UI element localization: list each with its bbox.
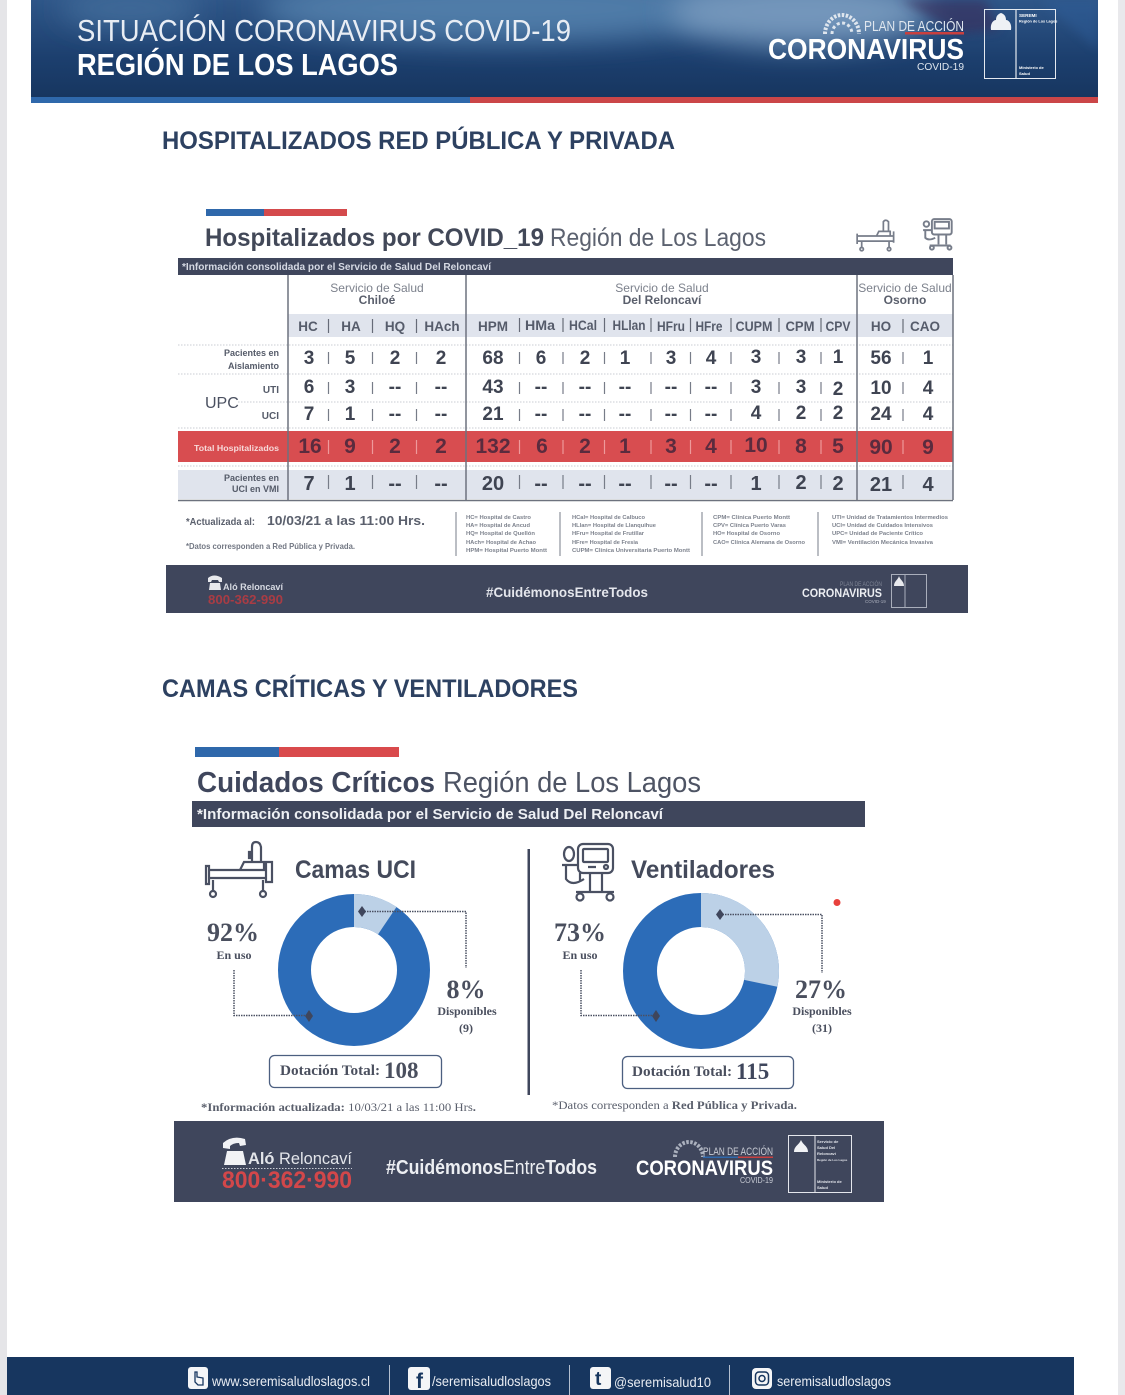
row: UCI en VMI: -- [704,473,718,495]
leader: disponibles camas [358,906,466,968]
row: UCI: 24 [870,404,892,425]
table title [205,224,766,252]
row: UCI en VMI: -- [534,473,548,495]
row: UTI: -- [579,377,591,398]
row: UCI en VMI: -- [618,473,632,495]
abbreviations legend: HQ= Hospital de Quellón [466,531,536,537]
header title [77,13,571,82]
icon: facebook [408,1367,430,1393]
update note [186,513,425,551]
row: UCI en VMI [303,472,934,496]
row: total hospitalizados: 6 [536,435,548,458]
footer band of table infographic: COVID-19 [865,599,886,604]
icon: instagram [752,1368,772,1389]
update note: 10/03/21 a las 11:00 Hrs. [267,513,425,528]
icon: bed small [857,220,894,251]
abbreviations legend: HO= Hospital de Osorno [713,531,781,537]
heading: hospitalizados: HOSPITALIZADOS RED PÚBLICA Y PRIVADA [162,125,675,155]
note: datos corresponden: *Datos corresponden a Red Pública y Privada. [552,1098,797,1112]
row: total hospitalizados: 90 [869,436,893,459]
column header row: HPM [478,319,508,334]
row: UCI: 4 [751,403,762,424]
row: UCI en VMI: 4 [922,474,934,496]
abbreviations legend: HFru= Hospital de Frutillar [572,531,645,537]
row: UCI en VMI: 21 [870,474,892,496]
logo: plan de accion coronavirus: COVID-19 [740,1176,773,1185]
footer band of table infographic [166,565,968,613]
row: UCI: -- [705,404,717,425]
stat: 92% en uso [207,918,259,962]
abbreviations legend: UPC= Unidad de Paciente Crítico [832,531,924,537]
row: UCI: 1 [345,404,356,425]
row labels: UCI [262,411,279,422]
header logo: seremi ministerio de salud [984,9,1057,78]
row: pacientes en aislamiento: 1 [923,348,934,369]
row: UCI: 21 [482,404,504,425]
row: UCI: -- [665,404,677,425]
row: UTI: -- [535,377,547,398]
row: UTI: 10 [870,378,892,399]
row labels: Pacientes en [224,348,279,358]
stat: 73% en uso: En uso [562,948,598,962]
row: pacientes en aislamiento: 4 [706,348,717,369]
row: UCI [304,403,934,425]
stat: 8% disponibles: Disponibles [437,1004,497,1018]
donut chart: camas uci [294,894,414,1030]
abbreviations legend: HC= Hospital de Castro [466,515,532,521]
icon: ventilator [562,844,614,900]
abbreviations legend: HAch= Hospital de Achao [466,540,537,546]
row: pacientes en aislamiento: 3 [304,348,314,369]
row: UTI [304,377,934,400]
logo: servicio de salud [788,1135,852,1192]
logo: servicio de salud: Salud [817,1185,828,1190]
column header row: HFre [696,319,723,334]
row: UTI: 2 [833,379,843,400]
heading: camas criticas: CAMAS CRÍTICAS Y VENTILADORES [162,674,578,703]
icon: tumblr [590,1367,611,1390]
row: total hospitalizados: 2 [389,435,401,458]
logo: plan de accion coronavirus: CORONAVIRUS [636,1157,773,1180]
row: total hospitalizados: 4 [705,435,717,458]
row: pacientes en aislamiento: 2 [436,348,446,369]
abbreviations legend: HFre= Hospital de Fresia [572,540,639,546]
row: UCI en VMI: -- [434,473,448,495]
box: dotacion total ventiladores [622,1056,794,1088]
row: UTI: 3 [796,377,806,398]
column header row: HC [298,319,318,334]
instagram handle: seremisaludloslagos [777,1373,891,1389]
table title: Hospitalizados por COVID_19 [205,224,544,252]
column header row: CUPM [736,319,772,334]
column header row [288,314,953,337]
abbreviations legend: VMI= Ventilación Mecánica Invasiva [832,540,934,546]
column header row: HQ [385,319,405,334]
abbreviations legend: HLlan= Hospital de Llanquihue [572,523,656,529]
stat: 8% disponibles: (9) [459,1021,473,1035]
box: dotacion total camas: Dotación Total: [280,1063,380,1079]
accent stripe [206,209,347,216]
service headers: Chiloé [359,293,396,307]
header logo: plan de accion coronavirus: PLAN DE ACCIÓN [864,18,964,35]
row: total hospitalizados: 9 [344,435,356,458]
footer band of table infographic: Aló Reloncaví [223,582,284,592]
footer band of table infographic: CORONAVIRUS [802,586,882,600]
header logo: plan de accion coronavirus: CORONAVIRUS [768,34,964,66]
column header row: HCal [569,318,597,333]
stat: 27% disponibles [792,975,852,1035]
row: pacientes en aislamiento: 6 [536,348,546,369]
accent stripe [195,747,399,757]
row: pacientes en aislamiento: 1 [833,347,844,368]
column header row: HAch [424,319,460,334]
info band [192,801,865,827]
row: pacientes en aislamiento: 3 [666,348,676,369]
leader: en uso ventiladores [581,970,660,1022]
row: total hospitalizados: 16 [298,435,322,458]
update note: *Datos corresponden a Red Pública y Privada. [186,542,355,551]
row: UTI: -- [435,377,447,398]
column header row: CPM [786,319,814,334]
abbreviations legend: CUPM= Clínica Universitaria Puerto Montt [572,548,690,554]
service headers: Del Reloncaví [623,293,702,307]
divider [528,849,530,1095]
icon: facebook: f [416,1370,424,1393]
stat: 27% disponibles: 27% [795,975,847,1004]
row: pacientes en aislamiento: 68 [482,348,504,369]
row: UTI: -- [705,377,717,398]
column separators on red row [328,440,903,454]
footer band of table infographic: PLAN DE ACCIÓN [840,581,882,588]
phone number: 800·362·990 [222,1167,352,1194]
tumblr handle: @seremisalud10 [614,1374,711,1390]
column header row: CAO [910,319,940,334]
abbreviations legend: UCI= Unidad de Cuidados Intensivos [832,523,933,529]
row: UCI en VMI: -- [664,473,678,495]
row: total hospitalizados [298,434,934,459]
row: total hospitalizados: 3 [665,435,677,458]
row: total hospitalizados: 9 [922,436,934,459]
header logo: plan de accion coronavirus [768,15,964,73]
row: pacientes en aislamiento [304,347,934,369]
bottom contact bar [7,1357,1074,1395]
row: pacientes en aislamiento: 1 [620,348,631,369]
header title: SITUACIÓN CORONAVIRUS COVID-19 [77,13,571,48]
icon: web [188,1367,208,1389]
row: UTI: 3 [751,377,761,398]
header title: REGIÓN DE LOS LAGOS [77,46,398,82]
row: UTI: 4 [923,378,934,399]
row: UCI: 7 [304,404,314,425]
info band [178,258,953,275]
logo: plan de accion coronavirus: PLAN DE ACCIÓN [703,1145,773,1158]
row: pacientes en aislamiento: 2 [390,348,400,369]
label: UPC: UPC [205,395,239,412]
column header row: HFru [657,319,685,334]
row: UTI: 43 [482,377,504,398]
row: total hospitalizados: 5 [832,435,844,458]
logo: servicio de salud: Ministerio de [817,1179,842,1184]
row: pacientes en aislamiento: 5 [345,348,356,369]
logo: servicio de salud: Servicio de [817,1139,839,1144]
header logo: seremi ministerio de salud: Región de Los Lagos [1019,20,1057,24]
donut chart: ventiladores [640,893,779,1032]
column header row: HA [341,319,361,334]
abbreviations legend: HPM= Hospital Puerto Montt [466,548,547,554]
box: dotacion total ventiladores: Dotación Total: [632,1064,732,1080]
stat: 8% disponibles: 8% [446,975,486,1004]
row labels: UTI [263,385,279,396]
header logo: seremi ministerio de salud: Salud [1019,71,1030,76]
stat: 8% disponibles [437,975,497,1035]
abbreviations legend: UTI= Unidad de Tratamientos Intermedios [832,515,948,521]
stat: 92% en uso: 92% [207,918,259,947]
row labels: UCI en VMI [232,484,279,494]
footer band of table infographic: 800-362-990 [208,592,283,607]
column header row: HLlan [612,318,646,333]
row: total hospitalizados: 2 [435,435,447,458]
footer band of cuidados criticos [174,1121,884,1202]
row: UCI en VMI: 20 [482,473,504,495]
row: UCI en VMI: 2 [795,472,807,494]
row labels [194,348,279,494]
row: UCI: 2 [833,403,843,424]
service headers: Osorno [884,293,926,307]
row: UCI en VMI: 2 [832,473,844,495]
facebook handle: /seremisaludloslagos [432,1373,551,1389]
row: pacientes en aislamiento: 3 [751,347,761,368]
stat: 92% en uso: En uso [216,948,252,962]
hashtag: #CuidémonosEntreTodos [386,1157,597,1179]
panel title [197,767,701,799]
stat: 27% disponibles: (31) [812,1021,832,1035]
abbreviations legend: CPV= Clínica Puerto Varas [713,523,786,529]
leader: en uso camas [234,970,313,1022]
column header row: CPV [826,319,850,334]
icon: bed [206,842,272,897]
row: UTI: -- [389,377,401,398]
row: total hospitalizados: 2 [579,435,591,458]
row: UCI: -- [619,404,631,425]
service headers [330,281,952,307]
abbreviations legend: HA= Hospital de Ancud [466,523,531,529]
logo: plan de accion coronavirus [636,1142,773,1185]
panel title: Región de Los Lagos [443,767,701,799]
panel: hospitalizados table infographic [166,209,968,613]
row: UTI: -- [619,377,631,398]
header logo: seremi ministerio de salud: SEREMI [1019,13,1037,18]
logo: servicio de salud: Reloncaví [817,1151,837,1156]
column header row: HO [871,319,891,334]
header logo: plan de accion coronavirus: COVID-19 [917,61,964,73]
abbreviations legend [456,512,948,556]
header banner [31,0,1098,103]
info band: *Información consolidada por el Servicio de Salud Del Reloncaví [197,806,664,823]
row: UCI en VMI: -- [388,473,402,495]
icon: telephone [223,1138,246,1165]
abbreviations legend: CPM= Clínica Puerto Montt [713,515,790,521]
row: UTI: -- [665,377,677,398]
stat: 73% en uso [554,918,606,962]
row: UCI: -- [535,404,547,425]
row: pacientes en aislamiento: 56 [870,348,892,369]
stat: 73% en uso: 73% [554,918,606,947]
info band: *Información consolidada por el Servicio de Salud Del Reloncaví [182,262,492,273]
subheading: ventiladores: Ventiladores [631,856,775,884]
stat: 27% disponibles: Disponibles [792,1004,852,1018]
row: UCI: -- [579,404,591,425]
footer band of table infographic: #CuidémonosEntreTodos [486,584,648,600]
panel: cuidados criticos infographic [174,747,884,1202]
row: UCI: 2 [796,403,806,424]
row: UTI: 6 [304,377,314,398]
row labels: Pacientes en [224,473,279,483]
table title: Región de Los Lagos [550,224,766,252]
row: UTI: 3 [345,377,355,398]
row: UCI en VMI: 7 [303,473,315,495]
service headers: Servicio de Salud [858,281,952,295]
row: UCI en VMI: -- [578,473,592,495]
abbreviations legend: HCal= Hospital de Calbuco [572,515,646,521]
row: UCI: -- [435,404,447,425]
red dot [834,899,840,906]
row: UCI en VMI: 1 [344,473,356,495]
column header row: HMa [525,318,556,333]
logo: servicio de salud: Región de Los Lagos [817,1158,848,1162]
row: pacientes en aislamiento: 2 [580,348,590,369]
row labels: Aislamiento [228,361,279,371]
row: total hospitalizados: 8 [795,435,807,458]
row: total hospitalizados: 10 [744,434,768,457]
note: informacion actualizada: *Información actualizada: 10/03/21 a las 11:00 Hrs . [201,1102,476,1114]
row: total hospitalizados: 132 [475,435,511,458]
header logo: seremi ministerio de salud: Ministerio de [1019,65,1044,70]
icon: tumblr: t [595,1369,602,1390]
website: www.seremisaludloslagos.cl [211,1373,370,1389]
row: pacientes en aislamiento: 3 [796,347,806,368]
box: dotacion total camas: 108 [384,1058,418,1083]
service headers: Servicio de Salud [615,281,709,295]
row: UCI: -- [389,404,401,425]
column separators [328,352,903,490]
row labels: Total Hospitalizados [194,443,279,453]
icon: ventilator small [923,219,952,250]
box: dotacion total ventiladores: 115 [736,1059,769,1084]
panel title: Cuidados Críticos [197,767,435,799]
subheading: camas uci: Camas UCI [295,856,416,884]
box: dotacion total camas [270,1056,442,1088]
alo reloncavi: Aló Reloncaví [248,1149,352,1168]
row: UCI en VMI: 1 [750,473,762,495]
row: total hospitalizados: 1 [619,435,631,458]
row: UCI: 4 [923,404,934,425]
logo: servicio de salud: Salud Del [817,1145,835,1150]
abbreviations legend: CAO= Clínica Alemana de Osorno [713,540,806,546]
service headers: Servicio de Salud [330,281,424,295]
update note: *Actualizada al: [186,517,255,528]
leader: disponibles ventiladores [716,909,822,973]
